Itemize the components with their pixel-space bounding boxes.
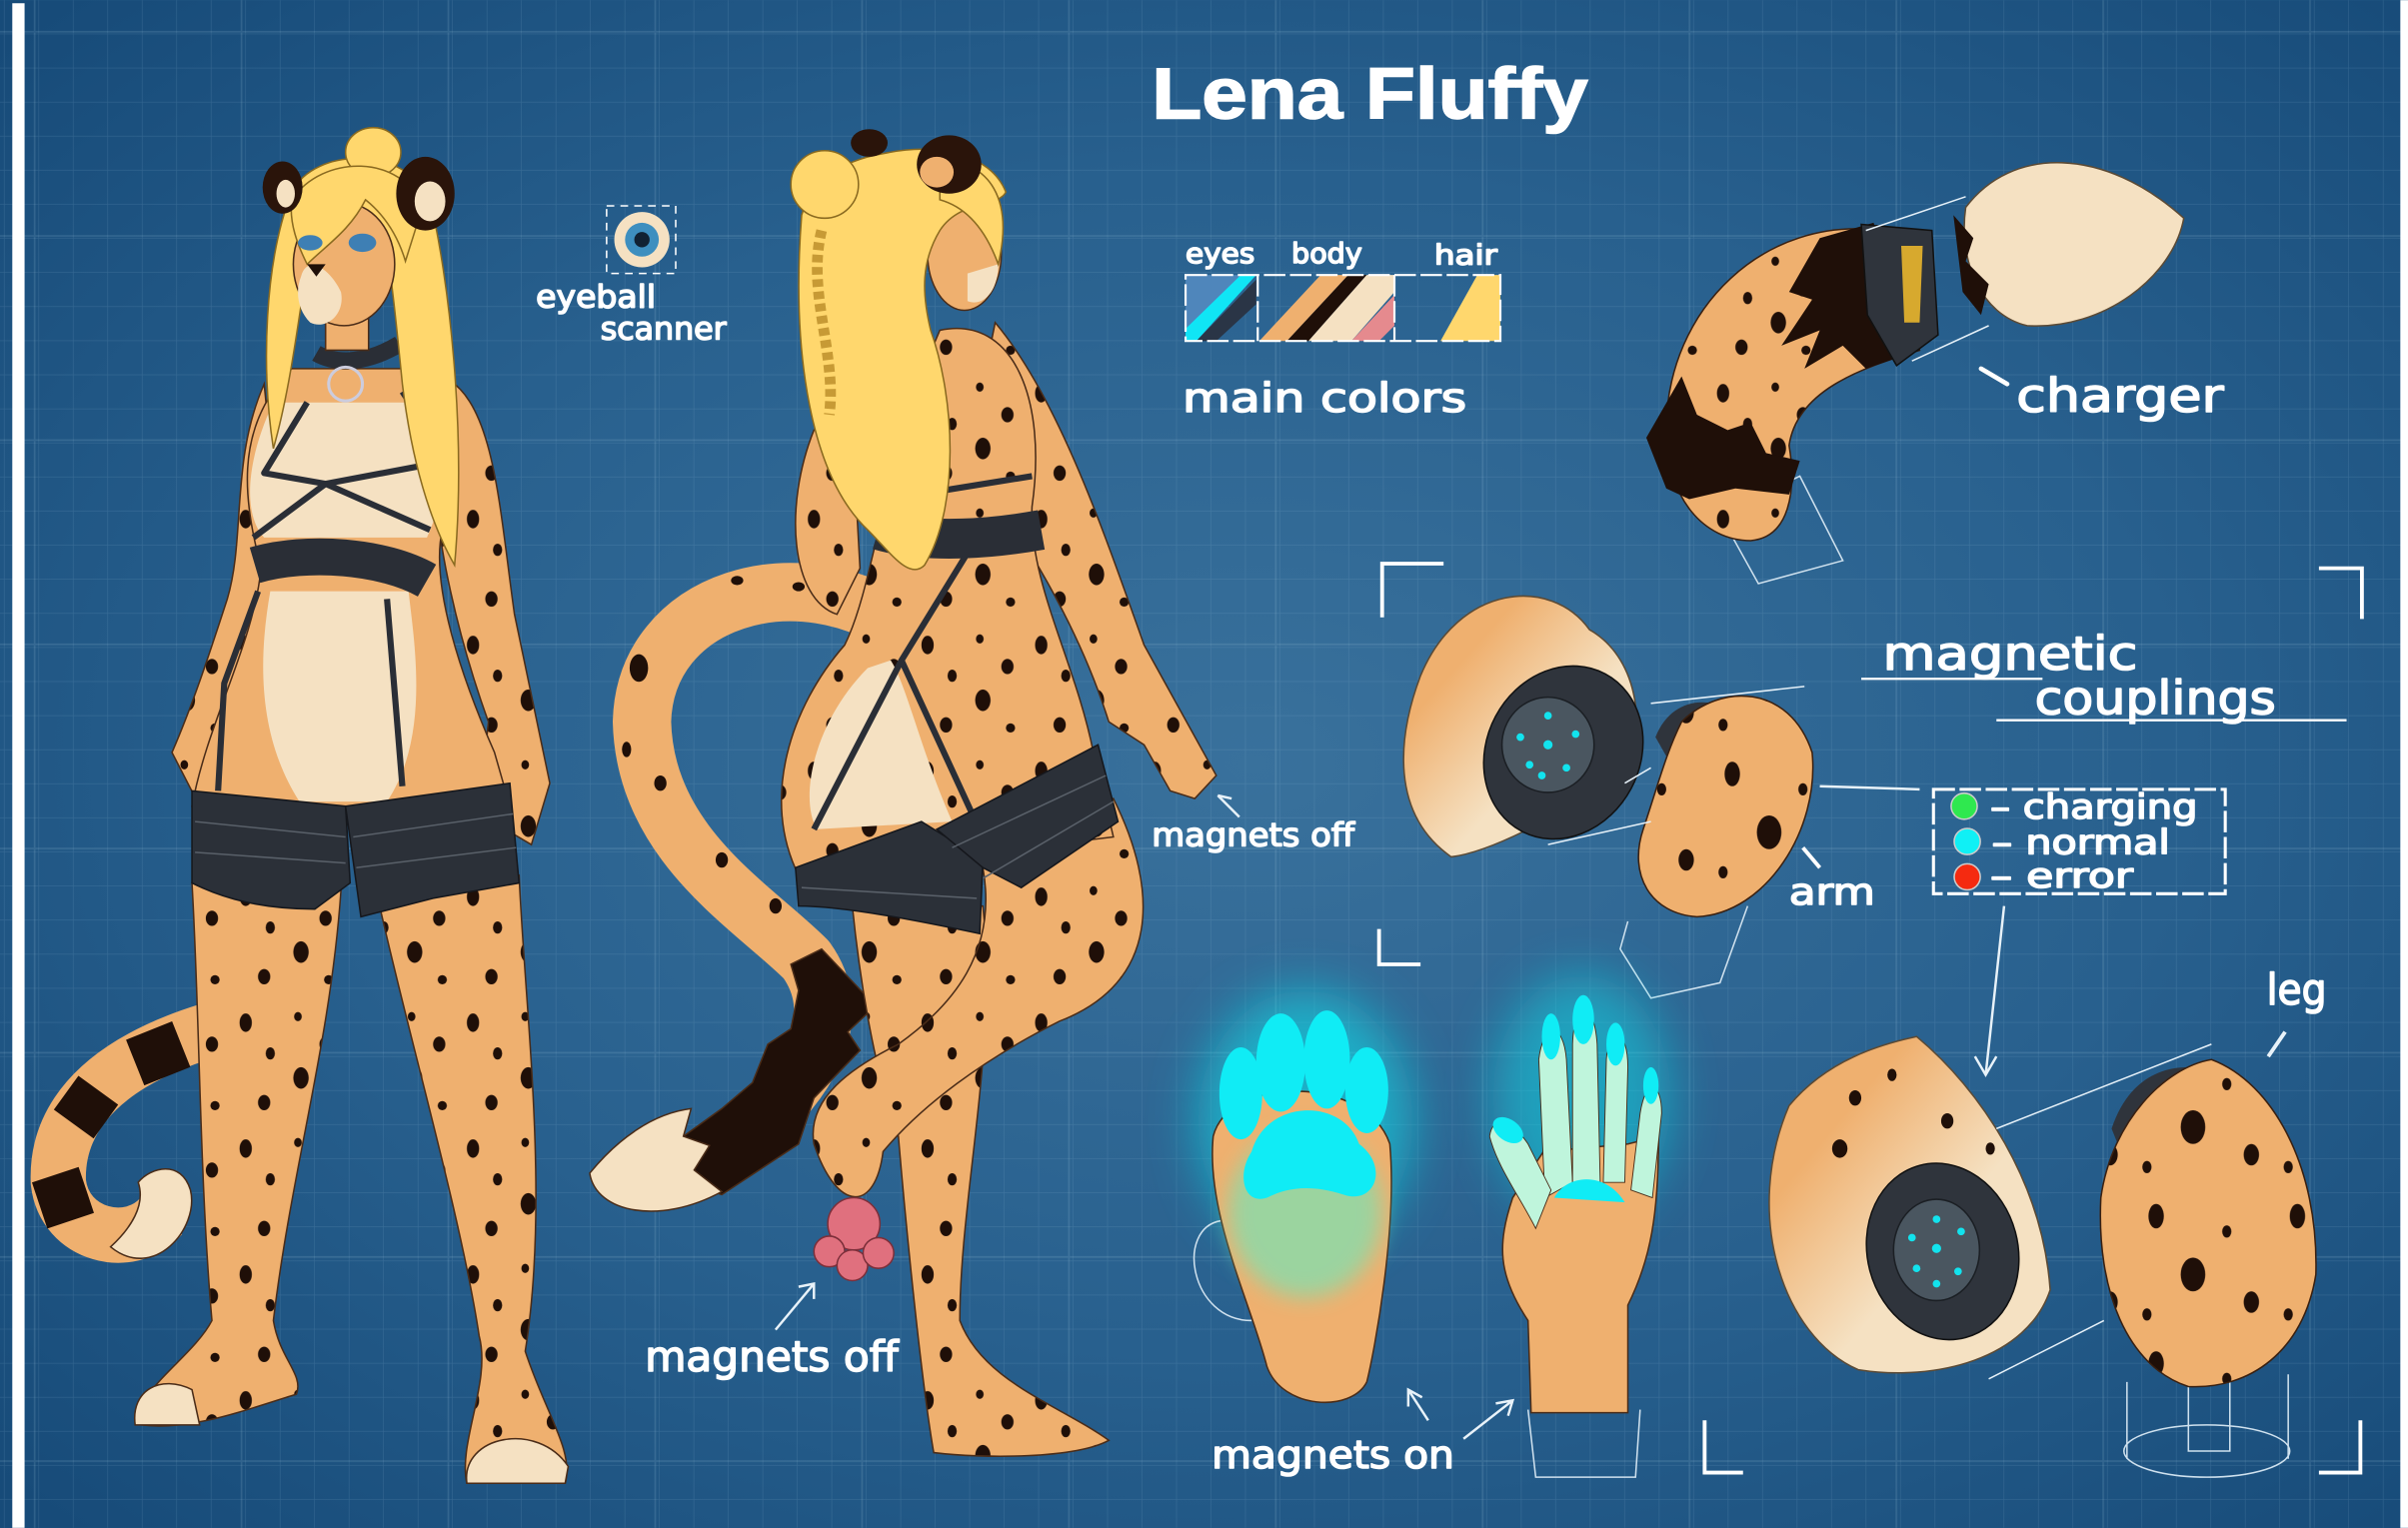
- illustration: glowing hand: [1488, 975, 1671, 1477]
- label: arm: [1789, 847, 1875, 913]
- heading: magnetic couplings: couplings: [2035, 672, 2276, 726]
- back and hips: [782, 329, 1114, 875]
- figure: front view: [55, 369, 568, 1483]
- component: tail with charger: [1646, 163, 2184, 584]
- icon: eyeball scanner: [607, 206, 676, 274]
- label: hair: hair: [1434, 238, 1498, 271]
- label: eyeball scanner: eyeball: [536, 279, 656, 315]
- label: eyes: eyes: [1186, 237, 1254, 270]
- harness: front view: [218, 344, 449, 790]
- label: body: body: [1291, 237, 1362, 270]
- pink paw: [814, 1198, 894, 1280]
- standing leg: [853, 906, 1109, 1456]
- tail: [55, 1013, 284, 1235]
- label: main colors: main colors: [1183, 376, 1466, 422]
- component: leg coupling: [1769, 1036, 2316, 1477]
- legend item: normal: – normal: [1992, 822, 2170, 861]
- illustration: glowing foot paw: [1195, 990, 1412, 1402]
- tail bands and tip: [684, 949, 876, 1194]
- legend item: error: – error: [1990, 856, 2133, 895]
- near arm: [796, 430, 860, 615]
- component: arm coupling: [1403, 597, 1813, 998]
- cream seat: [810, 661, 953, 829]
- label: magnets off foot: magnets off: [645, 1332, 900, 1381]
- legend: status colours: [1933, 787, 2225, 895]
- heading: magnetic couplings: [1861, 627, 2347, 726]
- legend item: charging: – charging: [1990, 787, 2198, 826]
- heading: magnetic couplings: magnetic: [1883, 627, 2138, 681]
- label: eyeball scanner: [536, 279, 727, 348]
- arm: [968, 323, 1216, 798]
- toes: [135, 1384, 568, 1483]
- label: magnets on: magnets on: [1211, 1433, 1454, 1478]
- corner brackets: [1379, 564, 2362, 1473]
- raised leg: [813, 798, 1144, 1197]
- cream front: [250, 403, 441, 801]
- head: front view: [263, 128, 459, 566]
- thigh bands: back view: [796, 745, 1118, 933]
- head and hair: back view: [791, 129, 1006, 570]
- torso: [192, 369, 510, 806]
- label: arm: arm: [1789, 870, 1875, 913]
- title: Lena Fluffy: [1152, 54, 1588, 134]
- tail spots: [622, 576, 842, 913]
- label: magnets off arm: magnets off: [1152, 816, 1355, 854]
- legend item: normal: [1954, 822, 2170, 861]
- palette: main colors: [1183, 237, 1500, 422]
- tail tip: [111, 1169, 192, 1258]
- right leg: [376, 875, 567, 1483]
- thigh bands: front view: [192, 783, 519, 916]
- label: charger: charger: [2016, 369, 2224, 423]
- figure: back view: [590, 323, 1216, 1456]
- left leg: [140, 883, 341, 1426]
- right arm: [435, 377, 550, 844]
- legend item: error: [1954, 856, 2133, 895]
- left arm: [172, 384, 280, 806]
- arrows: callout lines: [776, 786, 2285, 1439]
- label: eyeball scanner: scanner: [601, 312, 727, 348]
- harness: back view: [814, 476, 1042, 836]
- label: leg: leg: [2267, 965, 2327, 1015]
- big tail: [642, 593, 906, 1128]
